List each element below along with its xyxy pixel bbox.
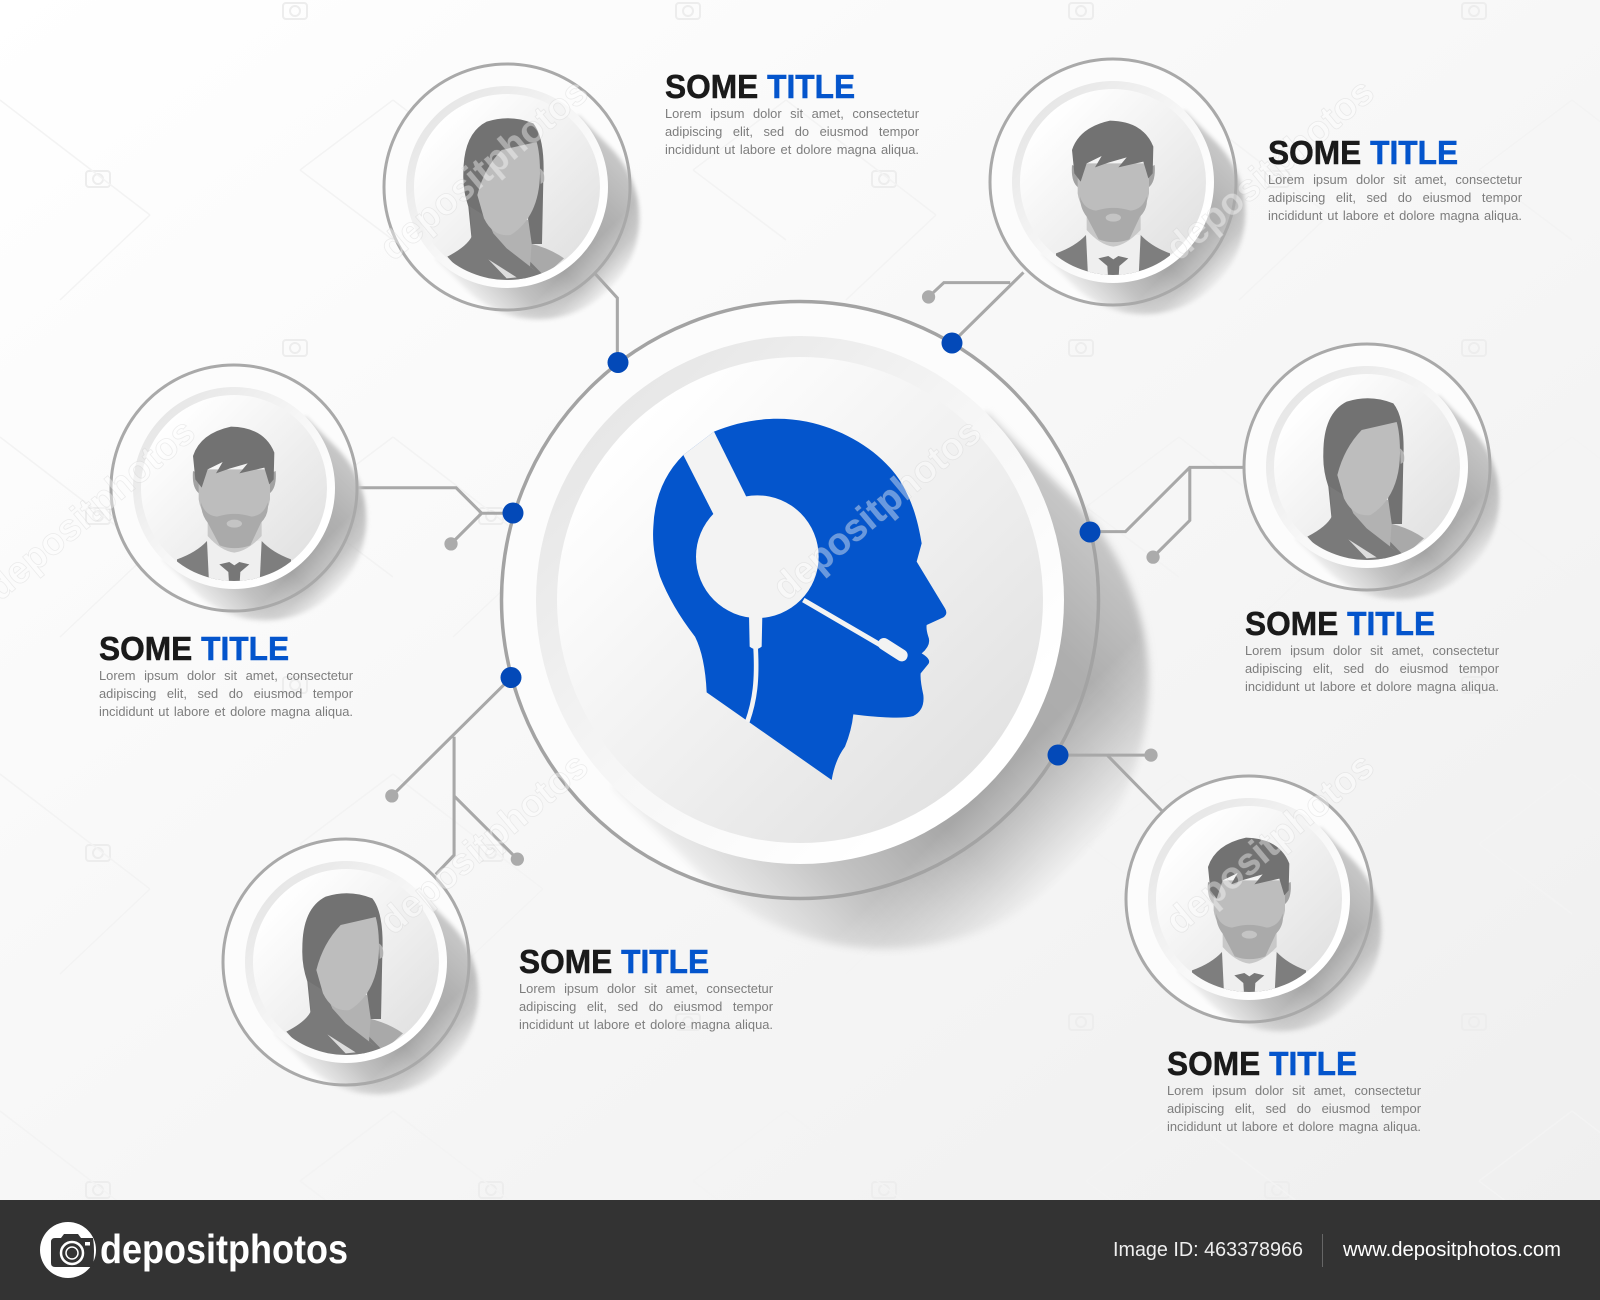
watermark text [0,71,1382,943]
watermark text: depositphotos [765,411,989,609]
text block: bottom center: adipiscing elit, sed do eiusmod tempor [519,999,773,1014]
avatar: woman right [1244,344,1499,599]
connector junction dots blue [500,332,1100,766]
text block: left: adipiscing elit, sed do eiusmod tempor [99,686,353,701]
text block: right: incididunt ut labore et dolore magna aliqua. [1245,679,1499,694]
watermark text: depositphotos [372,745,596,943]
text block: bottom right: SOME TITLE [1167,1045,1357,1082]
avatar: man bottom right [1126,776,1381,1031]
watermark text: depositphotos [1158,745,1382,943]
text block: bottom right: Lorem ipsum dolor sit amet, consectetur [1167,1083,1421,1098]
icon: blue head with headset [653,419,946,780]
text block: top right: incididunt ut labore et dolore magna aliqua. [1268,208,1522,223]
footer image id: Image ID: 463378966 [1113,1239,1303,1261]
text block: top right: adipiscing elit, sed do eiusmod tempor [1268,190,1522,205]
text block: bottom center: Lorem ipsum dolor sit amet, consectetur [519,981,773,996]
text block: top center: incididunt ut labore et dolore magna aliqua. [665,142,919,157]
connector end dots grey [385,290,1160,866]
text block: top center: adipiscing elit, sed do eiusmod tempor [665,124,919,139]
watermark text: depositphotos [1158,71,1382,269]
text block: top right: Lorem ipsum dolor sit amet, consectetur [1268,172,1522,187]
text block: top center [665,68,919,157]
watermark text: depositphotos [372,71,596,269]
text block: bottom right: incididunt ut labore et dolore magna aliqua. [1167,1119,1421,1134]
avatar: man top right [990,59,1245,314]
central disc with long shadow [502,302,1149,949]
text block: right: SOME TITLE [1245,604,1435,642]
avatar: woman bottom left [223,839,478,1094]
text block: left: incididunt ut labore et dolore magna aliqua. [99,704,353,719]
text block: top center: Lorem ipsum dolor sit amet, consectetur [665,106,919,121]
text block: left [99,630,353,719]
footer wordmark: depositphotos [100,1226,348,1272]
text block: left: SOME TITLE [99,630,289,667]
connector lines [358,272,1244,874]
text block: right: adipiscing elit, sed do eiusmod tempor [1245,661,1499,676]
text block: bottom right [1167,1045,1421,1134]
avatar: man left [111,365,366,620]
avatar: woman top left [384,64,639,319]
footer bar [0,1200,1600,1300]
text block: bottom center [519,943,773,1032]
text block: top center: SOME TITLE [665,68,855,105]
footer logo camera icon [40,1222,96,1278]
text block: bottom right: adipiscing elit, sed do eiusmod tempor [1167,1101,1421,1116]
text block: bottom center: incididunt ut labore et dolore magna aliqua. [519,1017,773,1032]
text block: bottom center: SOME TITLE [519,943,709,980]
footer url: www.depositphotos.com [1342,1239,1561,1261]
text block: right: Lorem ipsum dolor sit amet, consectetur [1245,642,1499,658]
text block: top right: SOME TITLE [1268,134,1458,171]
text block: right [1245,604,1499,694]
text block: left: Lorem ipsum dolor sit amet, consectetur [99,668,353,683]
text block: top right [1268,134,1522,223]
